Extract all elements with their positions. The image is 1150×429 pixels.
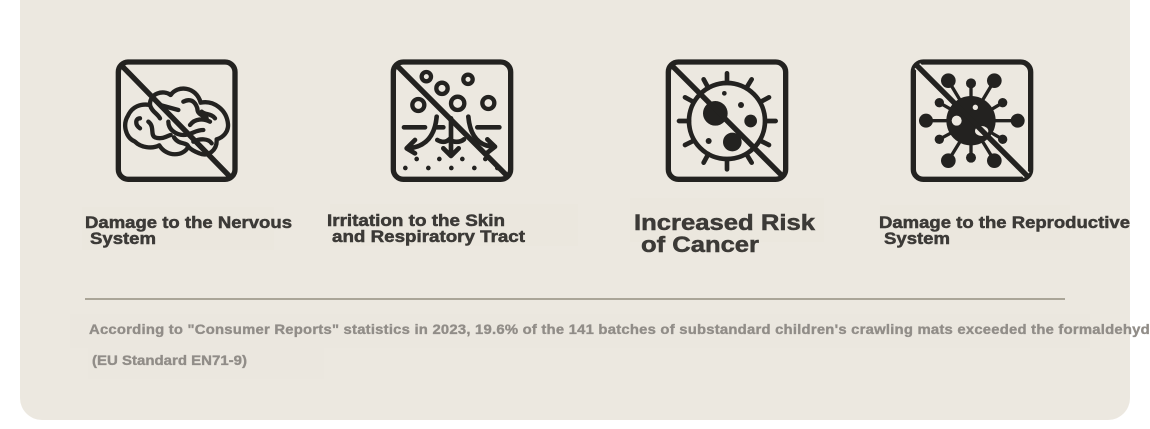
icon: cancer cell bbox=[668, 62, 786, 179]
label: cancer risk: of Cancer bbox=[641, 232, 759, 257]
footnote: statistics source bbox=[70, 314, 1150, 379]
label: skin and respiratory tract bbox=[327, 204, 578, 246]
icon: skin and respiratory irritation bbox=[393, 62, 511, 179]
label: cancer risk: Increased Risk bbox=[634, 210, 816, 235]
label: nervous system: Damage to the Nervous bbox=[85, 214, 292, 232]
label: cancer risk bbox=[630, 198, 824, 257]
label: nervous system: System bbox=[90, 230, 156, 248]
icon: nervous system damage bbox=[118, 62, 235, 179]
label: reproductive system: System bbox=[884, 230, 950, 248]
icon: reproductive system virus bbox=[913, 62, 1031, 179]
label: nervous system bbox=[82, 207, 292, 250]
label: skin and respiratory tract: and Respiratory Tract bbox=[332, 228, 526, 246]
label: skin and respiratory tract: Irritation to the Skin bbox=[327, 212, 505, 230]
label: reproductive system: Damage to the Reproductive bbox=[879, 214, 1130, 232]
label: reproductive system bbox=[879, 205, 1130, 250]
footnote: statistics source: (EU Standard EN71-9) bbox=[92, 353, 247, 368]
divider line bbox=[85, 298, 1065, 300]
